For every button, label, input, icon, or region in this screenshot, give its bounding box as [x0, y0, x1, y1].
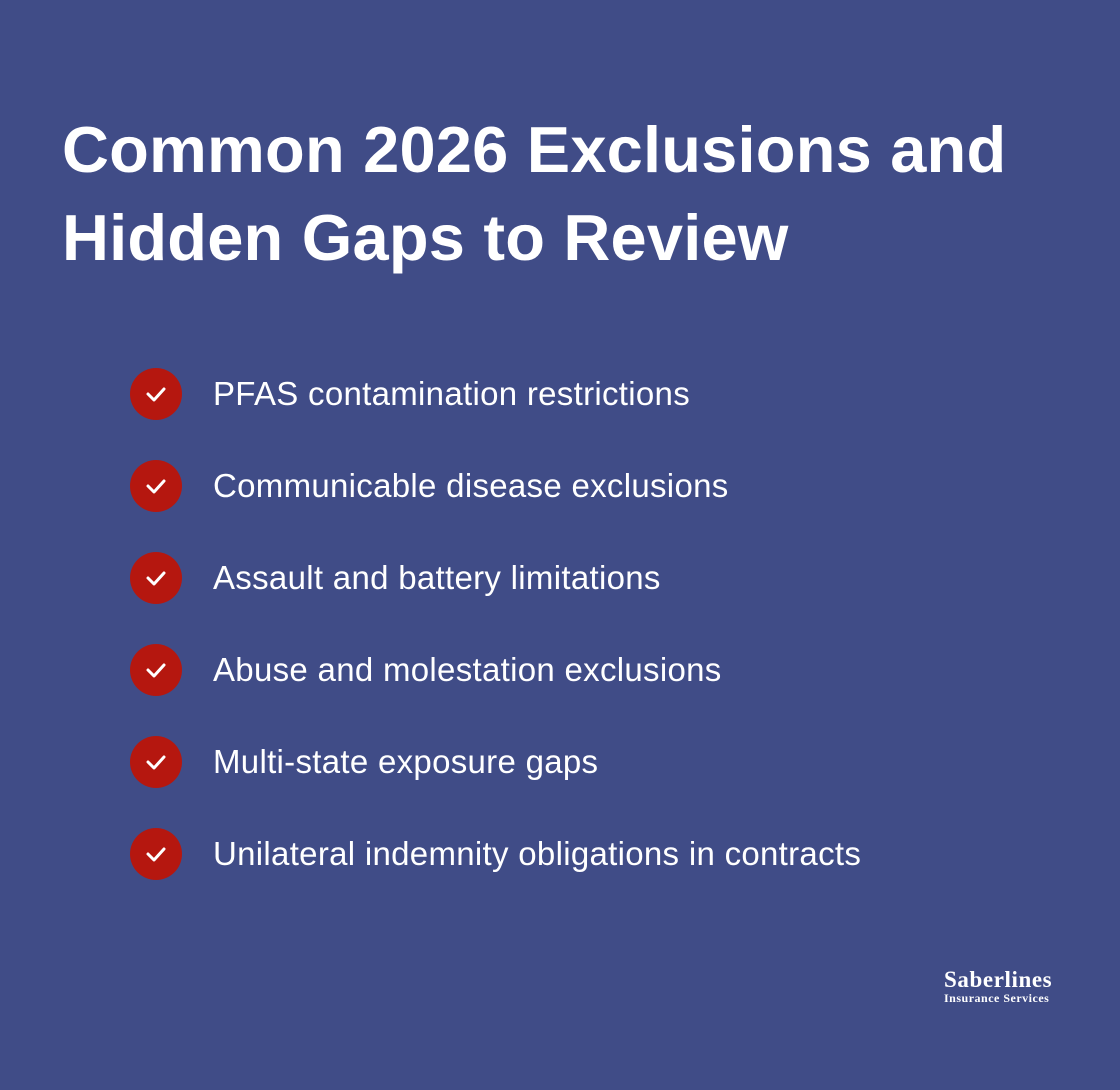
item: abuse — [130, 644, 722, 696]
item: multi-state — [130, 736, 598, 788]
title: Common 2026 Exclusions and — [62, 113, 1006, 186]
item: assault: Assault and battery limitations — [213, 559, 661, 596]
item: multi-state: Multi-state exposure gaps — [213, 743, 598, 780]
logo — [944, 967, 1052, 1005]
title: Hidden Gaps to Review — [62, 201, 789, 274]
item: communicable disease: Communicable disease exclusions — [213, 467, 729, 504]
logo: Saberlines — [944, 967, 1052, 992]
item: PFAS: PFAS contamination restrictions — [213, 375, 690, 412]
item: indemnity — [130, 828, 861, 880]
item: assault — [130, 552, 661, 604]
title — [62, 113, 1006, 274]
item: PFAS — [130, 368, 690, 420]
item: abuse: Abuse and molestation exclusions — [213, 651, 722, 688]
item: indemnity: Unilateral indemnity obligations in contracts — [213, 835, 861, 872]
logo: Insurance Services — [944, 991, 1049, 1005]
item: communicable disease — [130, 460, 729, 512]
